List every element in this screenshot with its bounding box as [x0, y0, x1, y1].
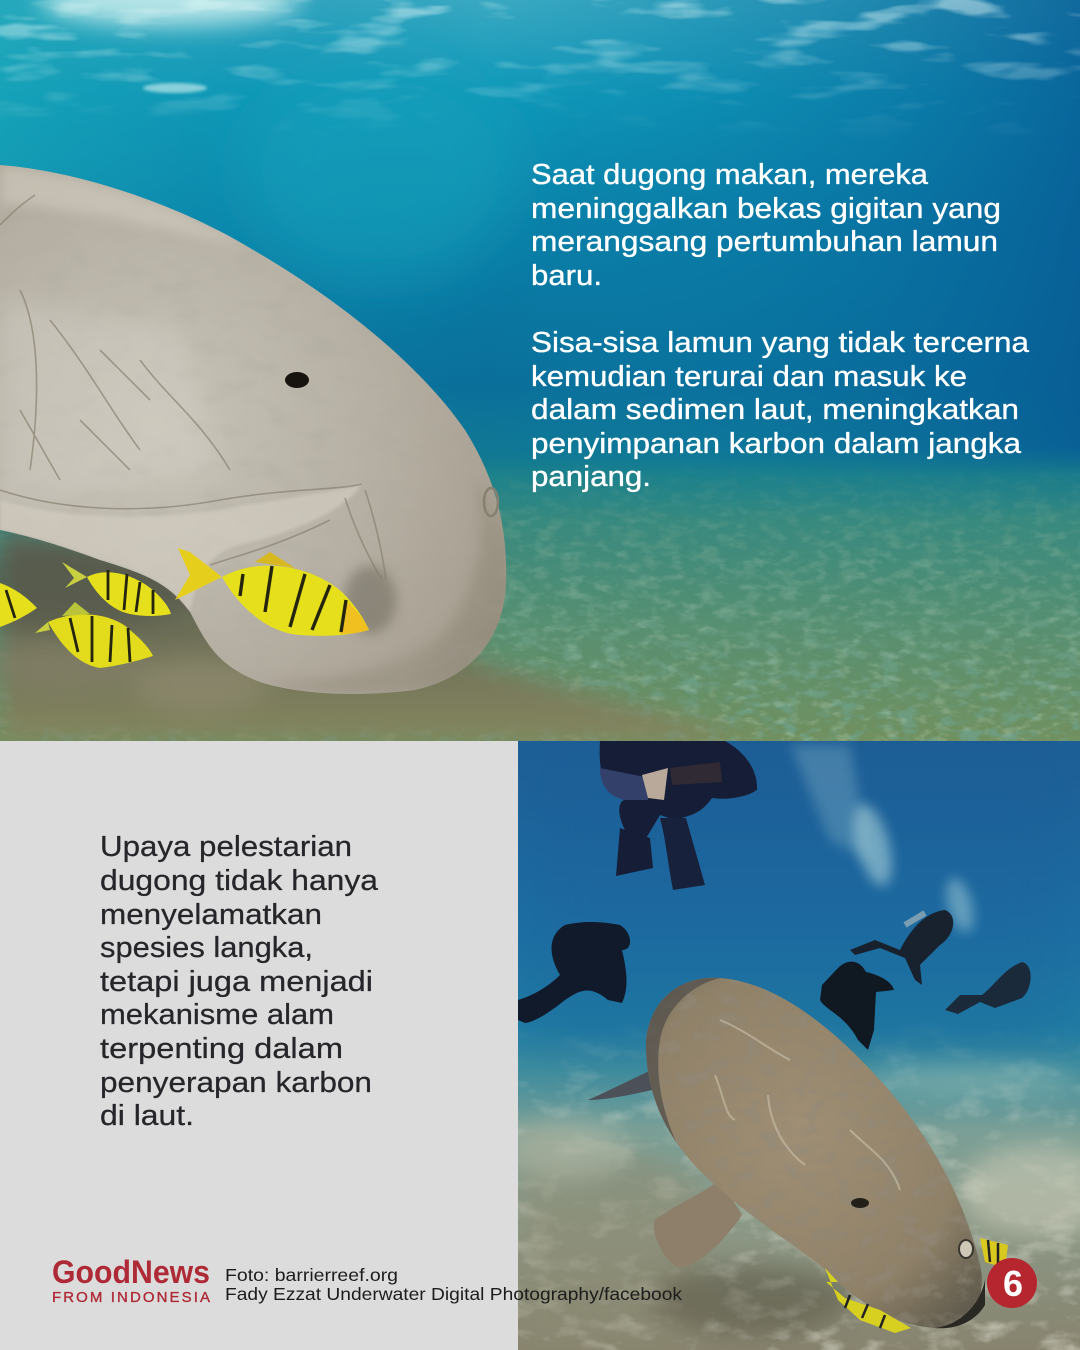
text block: conservation: menyelamatkan	[100, 899, 322, 931]
text block: dugong feeding: baru.	[531, 260, 602, 292]
seagrass sea floor	[0, 445, 1080, 741]
page number badge: 6	[1003, 1263, 1023, 1304]
text block: conservation: di laut.	[100, 1100, 194, 1132]
text block: dugong feeding: kemudian terurai dan masuk ke	[531, 361, 967, 393]
text block: conservation: mekanisme alam	[100, 999, 334, 1031]
diver centre	[820, 962, 894, 1050]
page number badge	[987, 1258, 1037, 1308]
text block: conservation: Upaya pelestarian	[100, 831, 352, 863]
fish lower	[35, 602, 153, 668]
dugong flipper	[654, 1180, 742, 1268]
text block: conservation: penyerapan karbon	[100, 1067, 372, 1099]
small yellow fish	[825, 1238, 1008, 1333]
dugong body	[0, 160, 510, 700]
photo credits	[225, 1265, 682, 1304]
diver right	[850, 910, 953, 985]
panel: grey text panel	[0, 741, 518, 1350]
logo: GoodNews from Indonesia: GoodNews	[52, 1254, 210, 1290]
text block: conservation: terpenting dalam	[100, 1033, 343, 1065]
diver far right	[945, 962, 1031, 1014]
fish middle	[62, 562, 171, 616]
text block: conservation: spesies langka,	[100, 932, 313, 964]
text block: conservation: dugong tidak hanya	[100, 865, 379, 897]
text block: conservation	[100, 831, 379, 1132]
logo: GoodNews from Indonesia: FROM INDONESIA	[52, 1289, 210, 1306]
dugong body	[640, 970, 990, 1335]
fish cropped at left	[0, 583, 37, 627]
logo: GoodNews from Indonesia	[52, 1254, 210, 1306]
text block: dugong feeding: Saat dugong makan, mereka	[531, 159, 929, 191]
dugong tail	[588, 1072, 652, 1100]
text block: dugong feeding: meninggalkan bekas gigitan yang	[531, 193, 1001, 225]
water surface highlights	[0, 0, 1080, 140]
dugong blowhole/eye	[285, 372, 309, 388]
photo credits: Fady Ezzat Underwater Digital Photography/facebook	[225, 1284, 682, 1304]
yellow striped fish school	[0, 548, 369, 668]
text block: conservation: tetapi juga menjadi	[100, 966, 373, 998]
text block: dugong feeding: Sisa-sisa lamun yang tidak tercerna	[531, 327, 1030, 359]
photo: dugong swimming over seagrass	[0, 0, 1080, 741]
text block: dugong feeding: panjang.	[531, 461, 651, 493]
photo: divers around dugong on sandy floor	[505, 741, 1080, 1350]
text block: dugong feeding: dalam sedimen laut, meningkatkan	[531, 394, 1019, 426]
fish large	[175, 548, 369, 636]
open water background	[0, 0, 1080, 512]
diver with camera	[600, 741, 757, 890]
text block: dugong feeding: penyimpanan karbon dalam jangka	[531, 428, 1022, 460]
photo credits: Foto: barrierreef.org	[225, 1265, 398, 1285]
bubble columns	[790, 745, 979, 935]
blue water and sand	[505, 741, 1080, 1350]
text block: dugong feeding	[531, 159, 1030, 493]
diver left	[518, 922, 630, 1023]
text block: dugong feeding: merangsang pertumbuhan lamun	[531, 226, 998, 258]
